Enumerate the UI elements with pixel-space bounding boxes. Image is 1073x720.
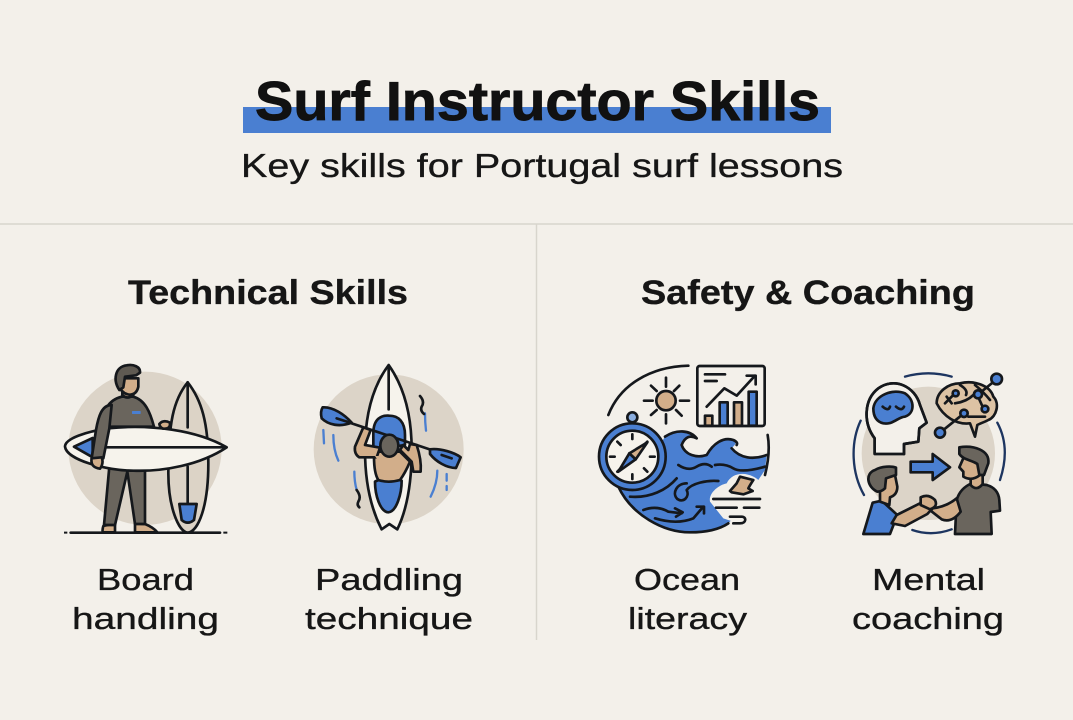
label: mental coaching: Mental [872, 562, 985, 597]
heading: safety and coaching: Safety & Coaching [641, 274, 975, 312]
label: mental coaching: coaching [852, 601, 1004, 636]
panel: technical skills [64, 274, 473, 636]
panel: safety and coaching [599, 274, 1005, 636]
icon: board handling [64, 365, 227, 534]
label: paddling technique: Paddling [315, 562, 463, 597]
label: board handling: handling [72, 601, 219, 636]
title highlight band [243, 107, 831, 133]
icon: ocean literacy [599, 366, 769, 532]
subtitle: Key skills for Portugal surf lessons [241, 147, 843, 184]
heading: technical skills: Technical Skills [128, 274, 408, 312]
icon: paddling technique [314, 365, 464, 529]
label: paddling technique: technique [305, 601, 473, 636]
label: ocean literacy: literacy [628, 601, 748, 636]
title [243, 70, 831, 133]
icon: mental coaching [854, 373, 1005, 534]
label: ocean literacy: Ocean [634, 562, 740, 597]
title text: Surf Instructor Skills [255, 70, 820, 132]
label: board handling: Board [97, 562, 194, 597]
